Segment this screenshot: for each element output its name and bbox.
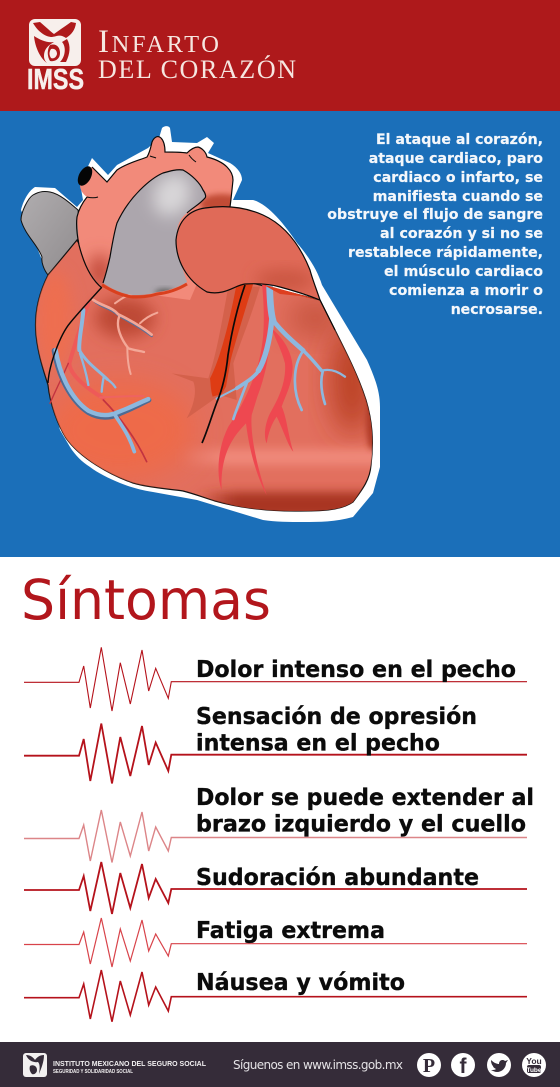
icon: pinterest	[417, 1053, 441, 1077]
symptom text 4: Sudoración abundante	[196, 865, 479, 891]
text block: intro paragraph: cardiaco o infarto, se	[373, 170, 543, 186]
symptom 6	[24, 970, 527, 1022]
heart white halo	[21, 126, 380, 522]
vessels	[50, 280, 345, 495]
pulse line 1	[24, 647, 527, 711]
pulse line 5	[24, 918, 527, 967]
ventricle lobe	[176, 207, 335, 330]
body shading	[37, 270, 390, 518]
pulse line 3	[24, 810, 527, 862]
symptom text 3: Dolor se puede extender al	[196, 785, 534, 811]
icon: pinterest: P	[423, 1055, 435, 1077]
header band	[0, 0, 560, 111]
icon: youtube	[522, 1053, 546, 1077]
pulse line 2	[24, 724, 527, 784]
panel: blue heart panel	[0, 111, 560, 557]
footer institution name: INSTITUTO MEXICANO DEL SEGURO SOCIAL	[53, 1059, 206, 1068]
heading: Síntomas: Síntomas	[21, 568, 271, 632]
text block: intro paragraph: ataque cardiaco, paro	[369, 151, 543, 167]
icon: facebook	[451, 1053, 475, 1078]
symptom 2	[24, 704, 527, 784]
footer band	[0, 1042, 560, 1087]
illustration: heart	[21, 126, 390, 522]
text block: intro paragraph: obstruye el flujo de sangre	[327, 207, 543, 223]
symptom text 6: Náusea y vómito	[196, 970, 405, 996]
grey aorta	[103, 167, 206, 297]
text block: intro paragraph	[327, 132, 543, 318]
title line 2: DEL CORAZÓN	[98, 55, 296, 84]
pulse line 4	[24, 862, 527, 914]
red arteries left	[50, 303, 147, 462]
footer institution name	[53, 1059, 206, 1075]
icon: facebook: f	[460, 1055, 468, 1078]
footer logo	[23, 1053, 47, 1077]
pipe opening	[75, 164, 95, 188]
icon: youtube: You	[526, 1056, 542, 1066]
symptom 5	[24, 918, 527, 967]
central orange star	[172, 283, 260, 418]
symptom text 3: brazo izquierdo y el cuello	[196, 812, 526, 838]
ventricle body	[36, 240, 372, 511]
logo: IMSS	[27, 19, 84, 96]
red arteries right	[218, 280, 293, 495]
icon: youtube: Tube	[526, 1067, 542, 1074]
text block: intro paragraph: comienza a morir o	[389, 283, 543, 299]
red strip under lobe	[262, 284, 320, 300]
icon: twitter	[487, 1053, 511, 1077]
text block: intro paragraph: El ataque al corazón,	[376, 132, 543, 148]
symptom 1	[24, 647, 527, 711]
symptom text 2: Sensación de opresión	[196, 704, 477, 730]
pink coronary branch	[93, 293, 157, 374]
blue veins left	[54, 310, 149, 452]
symptom text 1: Dolor intenso en el pecho	[196, 657, 516, 683]
text block: intro paragraph: restablece rápidamente,	[348, 245, 543, 261]
body outlines	[48, 285, 245, 443]
text block: intro paragraph: el músculo cardiaco	[384, 264, 543, 280]
logo wordmark: IMSS	[27, 64, 84, 96]
text block: intro paragraph: al corazón y si no se	[380, 226, 543, 242]
symptom text 3	[196, 785, 534, 838]
title	[98, 24, 296, 84]
orange rim under grey vessel	[102, 284, 187, 297]
logo emblem	[29, 19, 81, 66]
text block: intro paragraph: necrosarse.	[451, 302, 543, 318]
pulse line 6	[24, 970, 527, 1022]
title line 1: INFARTO	[98, 24, 219, 60]
symptom 3	[24, 785, 534, 862]
blue veins right	[217, 280, 345, 419]
pink atrium	[75, 137, 244, 300]
footer institution name: SEGURIDAD Y SOLIDARIDAD SOCIAL	[53, 1069, 134, 1075]
symptom text 2: intensa en el pecho	[196, 731, 440, 757]
left grey vessel	[21, 191, 82, 275]
symptom text 5: Fatiga extrema	[196, 918, 385, 944]
text block: intro paragraph: manifiesta cuando se	[373, 189, 543, 205]
symptom text 2	[196, 704, 477, 757]
footer follow text: Síguenos en www.imss.gob.mx	[233, 1058, 403, 1072]
symptom 4	[24, 862, 527, 914]
